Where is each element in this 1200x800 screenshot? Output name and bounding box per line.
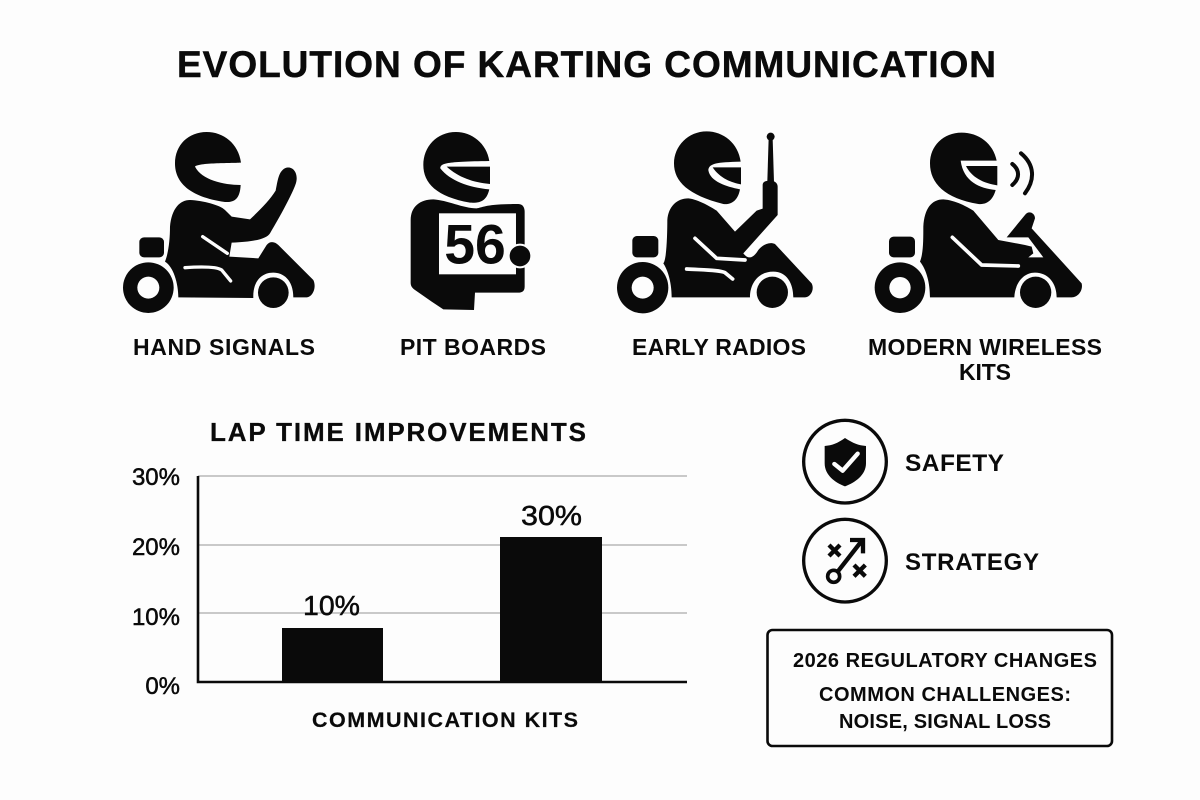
label: modern wireless kits	[868, 334, 1102, 385]
callout: regulatory changes and challenges: NOISE, SIGNAL LOSS	[839, 711, 1051, 733]
axis labels: 30%	[132, 464, 180, 491]
icon: driver with wireless headset	[875, 133, 1082, 313]
icon: driver holding pit board	[411, 132, 531, 310]
label: modern wireless kits: MODERN WIRELESS	[868, 334, 1102, 360]
axis labels: 0%	[145, 673, 180, 700]
callout: regulatory changes and challenges: 2026 REGULATORY CHANGES	[793, 650, 1097, 672]
callout: regulatory changes and challenges	[768, 630, 1112, 746]
bar: 10%: 10%	[303, 590, 360, 621]
label: pit boards: PIT BOARDS	[400, 334, 546, 360]
icon: driver holding pit board: 56	[444, 213, 506, 275]
bar: 30%	[500, 500, 602, 683]
icon: play diagram	[804, 519, 886, 602]
icon: shield with check	[804, 420, 886, 503]
bar chart	[132, 464, 687, 732]
panel: early radios	[617, 131, 813, 360]
label: modern wireless kits: KITS	[959, 359, 1011, 385]
axis labels: 20%	[132, 534, 180, 561]
title: EVOLUTION OF KARTING COMMUNICATION	[177, 44, 996, 85]
panel: modern wireless kits	[868, 133, 1102, 385]
label: early radios: EARLY RADIOS	[632, 334, 806, 360]
benefit: safety: SAFETY	[905, 450, 1004, 477]
callout: regulatory changes and challenges: COMMON CHALLENGES:	[819, 684, 1071, 706]
axis labels: 10%	[132, 604, 180, 631]
icon: driver with radio handset	[617, 131, 813, 313]
bar: 30%: 30%	[521, 500, 582, 531]
benefit: safety	[804, 420, 1004, 503]
icon: driver raising hand	[123, 132, 315, 313]
label: hand signals: HAND SIGNALS	[133, 334, 315, 360]
panel: pit boards	[400, 132, 546, 360]
bar: 10%	[282, 590, 383, 683]
panel: hand signals	[123, 132, 315, 360]
benefit: strategy	[804, 519, 1039, 602]
chart heading: LAP TIME IMPROVEMENTS	[210, 417, 586, 447]
axis labels	[132, 464, 180, 700]
benefit: strategy: STRATEGY	[905, 549, 1039, 576]
x-axis label: COMMUNICATION KITS	[312, 708, 578, 732]
